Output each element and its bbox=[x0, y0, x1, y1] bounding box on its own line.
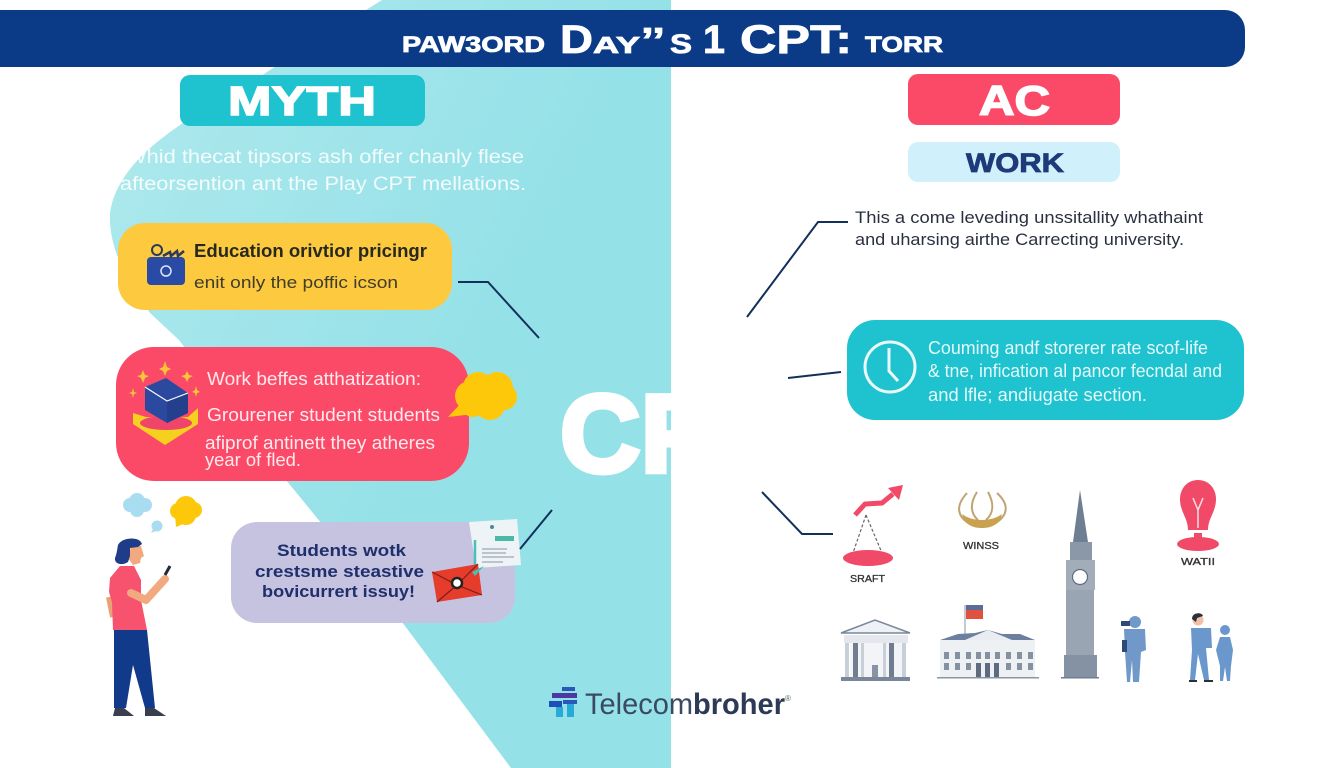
myth intro text: Whid thecat tipsors ash offer chanly flese bbox=[126, 147, 524, 168]
panel text: Education orivtior pricingr bbox=[194, 241, 427, 261]
icon: temple building bbox=[841, 620, 910, 681]
myth heading bbox=[180, 75, 425, 126]
panel text: Work beffes atthatization: bbox=[207, 369, 421, 389]
centre label CPT: CPT bbox=[560, 373, 783, 496]
icon: laurel wreath bbox=[959, 492, 1006, 552]
icon: laurel wreath: WINSS bbox=[963, 541, 999, 552]
panel text: afiprof antinett they atheres bbox=[205, 433, 435, 453]
panel text: Students wotk bbox=[277, 541, 407, 560]
panel text: and lfle; andiugate section. bbox=[928, 385, 1147, 405]
title banner: D bbox=[560, 18, 593, 62]
connector: icons to centre bbox=[762, 492, 833, 534]
icon: yellow thought cloud bbox=[170, 496, 202, 527]
icon: person with camera bbox=[1121, 616, 1146, 682]
icon: lightbulb bbox=[1177, 480, 1219, 568]
icon: blue thought cloud bbox=[123, 493, 152, 517]
icon: lightbulb: WATII bbox=[1181, 557, 1215, 568]
panel: education pricing myth bbox=[118, 223, 452, 310]
panel text bbox=[255, 541, 424, 601]
icon: yellow speech cloud bbox=[448, 372, 517, 420]
icon: clock tower bbox=[1061, 490, 1099, 678]
icon: government building with flag bbox=[937, 605, 1039, 678]
panel text bbox=[194, 241, 427, 292]
panel text bbox=[205, 369, 440, 470]
title banner bbox=[0, 10, 1245, 67]
title banner: 1 bbox=[703, 18, 725, 62]
background: teal shape bbox=[110, 0, 671, 768]
title banner: AY bbox=[593, 32, 640, 58]
connector: teal panel to centre bbox=[788, 372, 841, 378]
panel text: Couming andf storerer rate scof-life bbox=[928, 338, 1208, 358]
icon: camera clapper bbox=[147, 245, 185, 285]
title banner: PAW3ORD bbox=[402, 32, 545, 57]
myth intro text: afteorsention ant the Play CPT mellations. bbox=[120, 174, 526, 195]
fact text bbox=[855, 208, 1203, 249]
logo: Telecombroher: Telecom bbox=[585, 688, 693, 721]
panel: students work myth bbox=[231, 519, 521, 623]
icon: document bbox=[469, 519, 521, 568]
icon: two people standing bbox=[1189, 613, 1233, 682]
connector: students to centre bbox=[520, 510, 552, 549]
fact heading: AC bbox=[979, 77, 1050, 124]
myth intro text bbox=[120, 147, 526, 195]
panel text: Grourener student students bbox=[207, 405, 440, 425]
icon: red envelope with clock bbox=[432, 564, 484, 602]
panel: teal fact bbox=[847, 320, 1244, 420]
icon: small blue thought cloud bbox=[151, 520, 162, 533]
icon: scale with rising arrow: SRAFT bbox=[850, 574, 885, 585]
title banner: CPT: bbox=[740, 18, 852, 62]
icon: clock bbox=[865, 342, 915, 392]
logo: Telecombroher: ® bbox=[785, 694, 791, 703]
work subheading bbox=[908, 142, 1120, 182]
panel text bbox=[928, 338, 1222, 405]
logo: Telecombroher bbox=[549, 687, 791, 721]
icon: logo mark bbox=[549, 687, 577, 717]
fact text: and uharsing airthe Carrecting university. bbox=[855, 230, 1184, 249]
connector: fact text to centre bbox=[747, 222, 848, 317]
panel: work before authorization myth bbox=[116, 347, 469, 481]
fact text: This a come leveding unssitallity whathaint bbox=[855, 208, 1203, 227]
connector: education to centre bbox=[458, 282, 539, 338]
fact heading bbox=[908, 74, 1120, 125]
title banner: TORR bbox=[865, 32, 943, 57]
panel text: & tne, infication al pancor fecndal and bbox=[928, 361, 1222, 381]
icon: cube with stars bbox=[129, 361, 200, 445]
illustration: person with phone and thought clouds bbox=[109, 493, 202, 716]
title banner: ’’ bbox=[641, 20, 665, 61]
panel text: year of fled. bbox=[205, 450, 301, 470]
panel text: bovicurrert issuy! bbox=[262, 582, 415, 601]
logo: Telecombroher: broher bbox=[693, 688, 785, 721]
panel text: enit only the poffic icson bbox=[194, 273, 398, 292]
work subheading: WORK bbox=[966, 148, 1065, 178]
myth heading: MYTH bbox=[228, 78, 376, 124]
figure bbox=[109, 538, 170, 716]
panel text: crestsme steastive bbox=[255, 562, 424, 581]
icon: scale with rising arrow bbox=[843, 485, 903, 585]
title banner: S bbox=[670, 29, 692, 59]
